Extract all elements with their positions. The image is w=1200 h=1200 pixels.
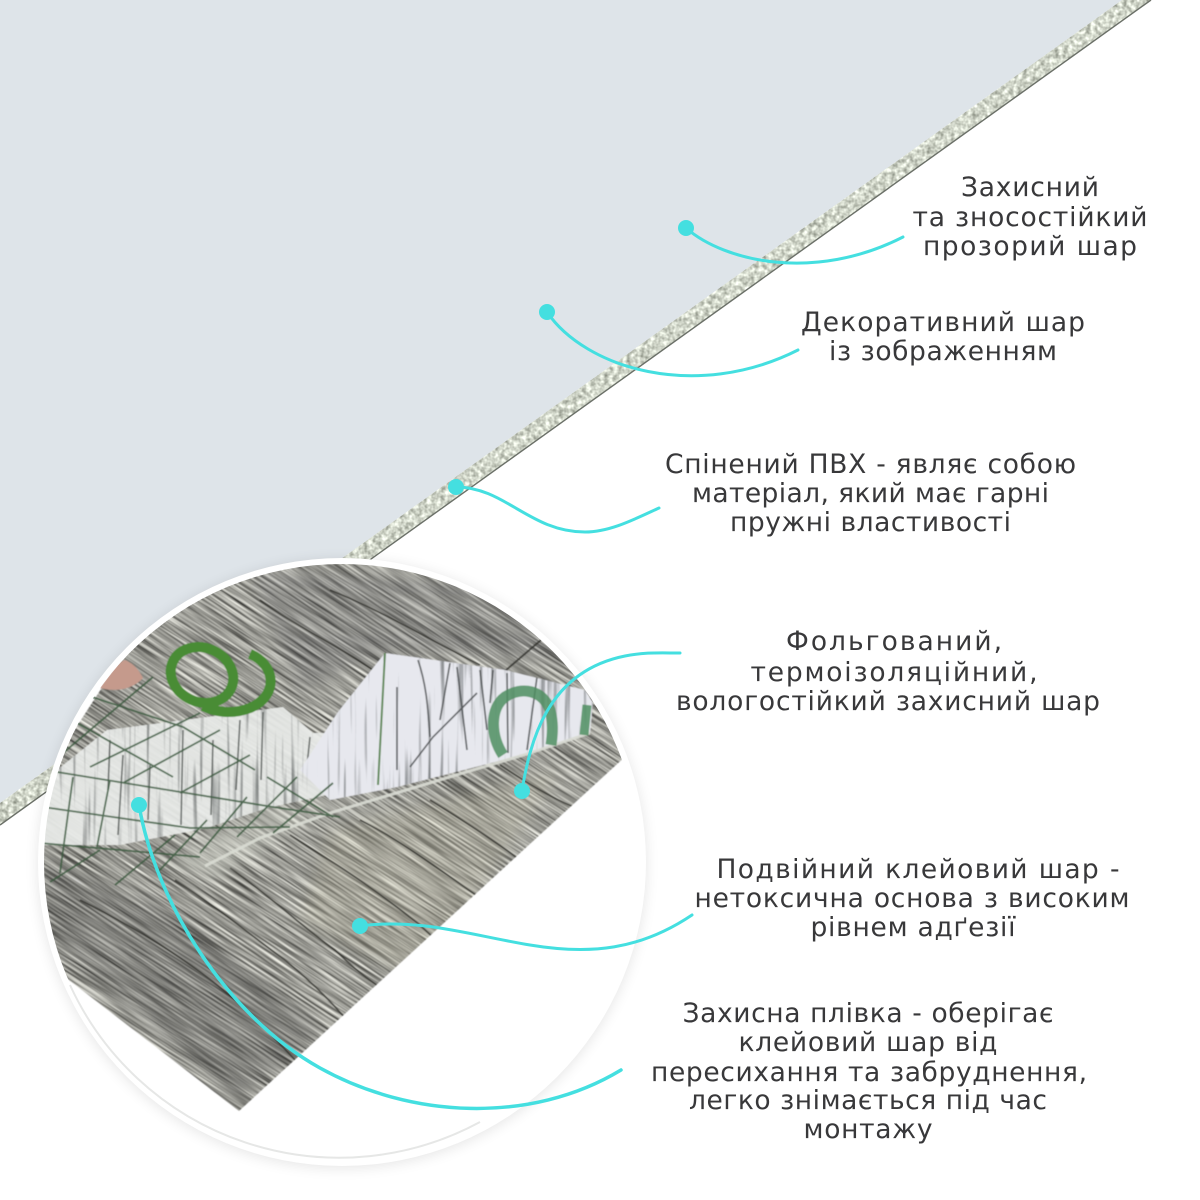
callout line 5: adhesive layer <box>352 915 692 950</box>
callout line 4: foil layer <box>514 653 680 799</box>
callout line 2: decorative layer <box>539 304 798 376</box>
label: double adhesive layer <box>694 854 1130 943</box>
label: foil layer: термоізоляційний, <box>750 657 1038 688</box>
photo: wood surface with peeled film <box>44 564 622 1112</box>
film fold highlight <box>205 733 590 866</box>
label: protective transparent layer: Захисний <box>961 172 1099 203</box>
label: foamed PVC: Спінений ПВХ - являє собою <box>665 449 1076 480</box>
label: decorative layer: із зображенням <box>829 336 1057 367</box>
magnifier circle with product close-up <box>35 557 649 1171</box>
green logo: first ring <box>162 637 271 713</box>
wood cracks <box>80 590 600 1065</box>
label: protective film: легко знімається під час <box>689 1085 1047 1116</box>
left film scratches <box>108 712 310 835</box>
label: foamed PVC: пружні властивості <box>730 507 1011 538</box>
label: protective transparent layer: прозорий шар <box>923 231 1137 262</box>
right film scratches <box>397 660 537 770</box>
label: protective film: клейовий шар від <box>738 1027 998 1058</box>
label: double adhesive layer: Подвійний клейовий шар - <box>716 854 1120 885</box>
label: foil layer: вологостійкий захисний шар <box>676 686 1100 717</box>
green logo: second ring <box>493 691 587 755</box>
panel: large light-blue sheet <box>0 0 1122 803</box>
label: double adhesive layer: нетоксична основа з високим <box>694 883 1130 914</box>
label: protective film <box>651 998 1087 1145</box>
label: protective film: монтажу <box>804 1114 932 1145</box>
panel edge: foam layer strip <box>0 0 1151 825</box>
callout line 3: foamed PVC <box>448 479 659 532</box>
finger <box>100 660 143 690</box>
label: protective transparent layer <box>912 172 1148 262</box>
label: foil layer <box>676 626 1100 717</box>
text labels <box>651 172 1148 1145</box>
label: foamed PVC <box>665 449 1076 538</box>
peeled film: left white patch <box>44 706 326 846</box>
label: protective transparent layer: та зносостійкий <box>912 202 1148 233</box>
label: double adhesive layer: рівнем адґезії <box>810 912 1016 943</box>
label: protective film: пересихання та забруднення, <box>651 1057 1087 1088</box>
callout line 6: protective film <box>131 797 621 1108</box>
callout line 1: protective layer <box>678 220 903 263</box>
label: decorative layer: Декоративний шар <box>801 307 1085 338</box>
wood grain texture <box>44 564 622 1112</box>
wood tonal shading <box>40 570 600 1100</box>
film haze over wood <box>170 800 340 880</box>
label: foil layer: Фольгований, <box>786 626 1002 657</box>
label: foamed PVC: матеріал, який має гарні <box>692 478 1049 509</box>
label: protective film: Захисна плівка - оберігає <box>682 998 1054 1029</box>
label: decorative layer <box>801 307 1085 367</box>
peeled film: right white patch <box>300 650 600 810</box>
callout lines and dots <box>131 220 903 1108</box>
reinforcing mesh grid <box>40 653 385 885</box>
